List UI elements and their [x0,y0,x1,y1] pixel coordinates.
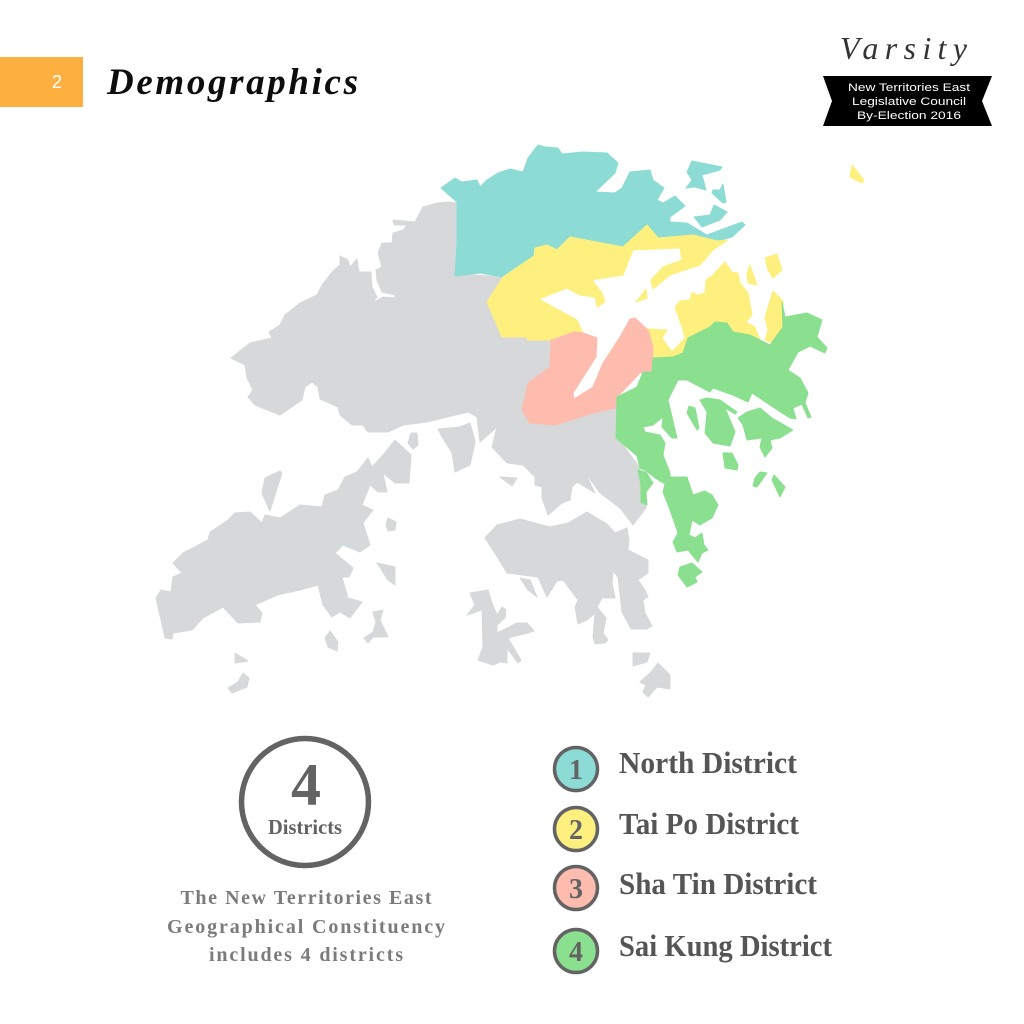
legend item: Tai Po District [554,806,800,850]
region 1: North District [441,145,745,277]
legend item: Sai Kung District: 4 [569,937,583,968]
stat block: 4 districts [167,738,445,966]
description text: includes 4 districts [209,944,403,966]
legend item: Tai Po District: 2 [569,815,583,846]
legend item: Sha Tin District: 3 [569,874,583,905]
legend item: North District: North District [619,745,798,780]
region 3: Sha Tin District [522,318,653,425]
legend item: Sai Kung District [554,928,833,972]
black ribbon banner [823,76,992,126]
black ribbon banner: New Territories East [848,82,970,94]
legend item: Sha Tin District [554,866,818,910]
black ribbon banner: By-Election 2016 [857,110,961,122]
non-constituency land in grey [156,202,670,697]
legend: districts [554,745,833,972]
header: section number and title [0,57,358,107]
legend item: Sha Tin District: Sha Tin District [619,866,818,901]
region 2: Tai Po District [487,165,864,358]
logo: Varsity: Varsity [840,30,968,66]
stat circle: Districts [268,815,342,839]
description text [167,887,445,966]
orange section tab [0,57,83,107]
legend item: North District: 1 [569,755,583,786]
title: Demographics [106,62,358,103]
legend item: Tai Po District: Tai Po District [619,806,800,841]
legend item: Sai Kung District: Sai Kung District [619,928,833,963]
stat circle [242,738,368,866]
region 4: Sai Kung District [616,302,827,587]
map of Hong Kong [156,145,864,697]
orange section tab: 2 [52,72,62,92]
description text: The New Territories East [180,887,432,909]
legend item: North District [554,745,798,790]
black ribbon banner: Legislative Council [852,96,966,108]
logo and election banner [823,30,992,126]
stat circle: 4 [291,752,321,818]
description text: Geographical Constituency [167,916,445,938]
